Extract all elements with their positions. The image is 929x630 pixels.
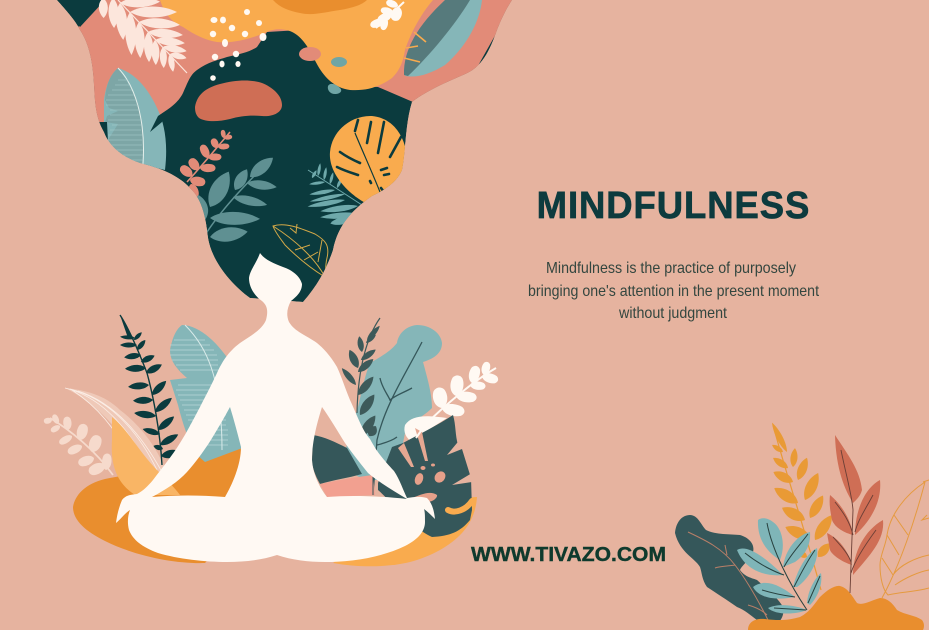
right upper leaf xyxy=(404,0,482,77)
terracotta fern xyxy=(827,435,883,593)
plants behind figure: right cluster xyxy=(312,318,499,566)
terracotta blob xyxy=(195,80,282,121)
orange fern xyxy=(769,421,836,590)
gold outline leaf xyxy=(273,224,328,277)
salmon sprig xyxy=(178,129,233,199)
orange ground blob xyxy=(73,447,244,563)
yellow ground blob xyxy=(333,497,477,566)
fine-lined cream leaf xyxy=(65,388,165,480)
description text: bringing one's attention in the present moment xyxy=(528,283,819,300)
dark fern xyxy=(120,315,181,465)
cream sprig xyxy=(369,0,404,31)
white dots xyxy=(210,9,266,81)
teal striped leaf xyxy=(104,68,166,170)
yellow leaf xyxy=(112,417,180,495)
pale sprig xyxy=(43,413,113,477)
salmon hair band xyxy=(78,0,515,125)
teal leaf xyxy=(346,325,442,480)
description text: without judgment xyxy=(618,305,727,322)
white sprig xyxy=(404,361,499,442)
seated meditating figure xyxy=(116,253,435,562)
orange monstera xyxy=(330,116,407,206)
dark patch beside teal leaf xyxy=(99,122,108,142)
illustration: flowing hair filled with foliage xyxy=(57,0,515,302)
plants behind figure: left cluster xyxy=(43,315,245,563)
teal fern xyxy=(737,518,821,614)
gold outline leaf xyxy=(880,480,929,598)
title: MINDFULNESS xyxy=(537,183,809,226)
description text xyxy=(528,260,819,322)
dark leaf blob xyxy=(675,515,783,623)
teal striped leaf behind arm xyxy=(170,325,245,462)
teal fern xyxy=(307,163,362,226)
pink patch in arm gap xyxy=(320,475,375,497)
dark corner top left xyxy=(57,0,99,27)
plants bottom right xyxy=(675,421,929,630)
dark notch by teal leaf xyxy=(150,108,170,132)
dark monstera xyxy=(378,415,472,537)
salmon pebble xyxy=(299,47,321,61)
teal small pebble xyxy=(328,84,341,94)
dark fern xyxy=(340,318,382,439)
yellow hair mass xyxy=(160,0,433,90)
sage branch xyxy=(197,158,276,242)
cream fern xyxy=(99,0,187,73)
website url: WWW.TIVAZO.COM xyxy=(471,544,666,566)
description text: Mindfulness is the practice of purposely xyxy=(546,260,796,277)
orange mound xyxy=(748,586,924,630)
dark patch in arm gap xyxy=(312,435,362,484)
orange top blob xyxy=(273,0,367,14)
teal pebble xyxy=(331,57,347,67)
teal leaf veins xyxy=(373,342,422,495)
